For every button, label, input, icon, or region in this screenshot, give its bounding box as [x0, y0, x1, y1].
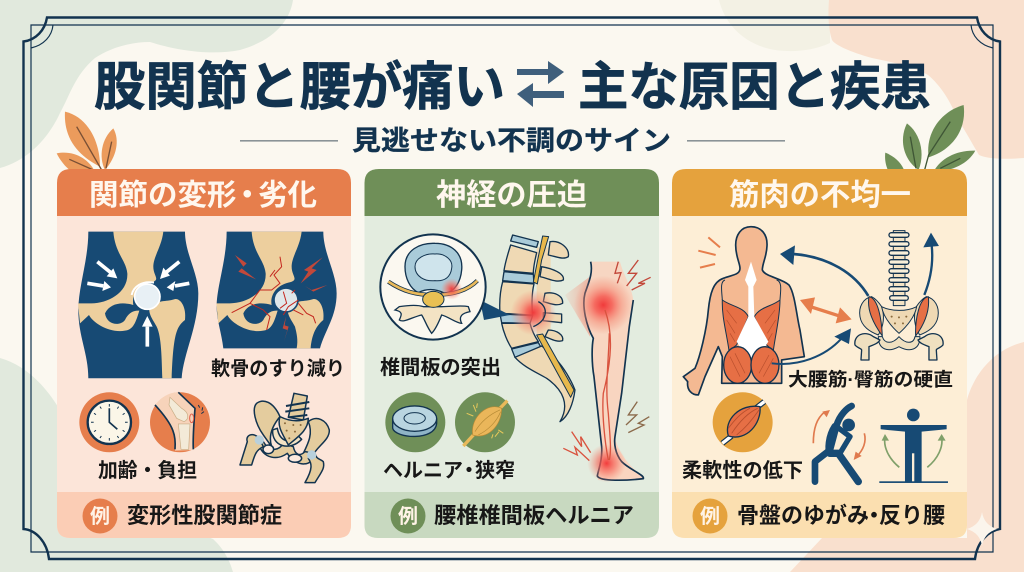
icon: clock: [79, 392, 139, 452]
example bar: 骨盤のゆがみ・反り腰: [737, 503, 945, 528]
panel heading: [57, 169, 351, 216]
background blob: green bottom left: [0, 358, 233, 572]
background blob: green top left: [0, 0, 293, 168]
icon: exchange arrows: [517, 61, 564, 107]
panel background: [364, 215, 659, 538]
panel heading: 神経の圧迫: [436, 179, 587, 212]
icon: stiff muscle: [713, 392, 773, 452]
panel heading: [364, 169, 659, 216]
example bar: 例: [700, 505, 720, 528]
icon: orange leaves: [57, 112, 117, 172]
icon: side stretch figure: [813, 406, 865, 482]
panel: muscle imbalance: [672, 169, 967, 538]
title: 主な原因と疾患: [578, 59, 931, 117]
icon: disc: [385, 392, 445, 452]
illustration: healthy hip under pressure: [78, 232, 198, 378]
icon: nerve narrowing: [455, 392, 515, 452]
label: cartilage wear: 軟骨のすり減り: [211, 357, 345, 380]
icon: sparkle: [967, 512, 997, 546]
example bar: [364, 492, 659, 538]
label: aging and load: 加齢・負担: [98, 459, 197, 482]
illustration: worn hip with cracks: [216, 232, 337, 348]
panel background: [672, 215, 967, 538]
label: hernia and stenosis: ヘルニア・狭窄: [383, 459, 515, 482]
background blob: peach bottom right: [790, 342, 1024, 572]
label: psoas and gluteal stiffness: 大腰筋·臀筋の硬直: [788, 369, 953, 390]
background blob: peach top right: [828, 0, 1024, 159]
example bar: 例: [90, 505, 110, 528]
example bar: 変形性股関節症: [127, 503, 282, 528]
arrows: muscle relationships: [772, 233, 939, 364]
example bar: 腰椎椎間板ヘルニア: [434, 503, 634, 528]
subtitle: 見逃せない不調のサイン: [352, 126, 671, 156]
panel heading: 筋肉の不均一: [729, 179, 911, 212]
example bar: [672, 492, 967, 538]
example bar: [57, 492, 351, 538]
panel heading: [672, 169, 967, 216]
icon: pelvis: [240, 393, 329, 483]
example bar: 例: [398, 505, 418, 528]
illustration: back muscles: [683, 227, 804, 395]
title: 股関節と腰が痛い: [94, 59, 505, 117]
illustration: spine with disc: [500, 235, 590, 422]
icon: green leaves: [885, 105, 975, 172]
icon: knee: [150, 392, 210, 452]
panel background: [57, 215, 351, 538]
label: disc protrusion: 椎間板の突出: [380, 356, 501, 379]
panel: nerve compression: [364, 169, 659, 538]
illustration: spine and pelvis: [855, 231, 943, 360]
title: [94, 59, 931, 117]
background blob: pale top middle: [719, 0, 830, 51]
panel: joint deformation: [57, 169, 351, 538]
label: reduced flexibility: 柔軟性の低下: [682, 459, 803, 482]
illustration: leg with pain: [563, 260, 651, 483]
arrows pointing inward: [87, 262, 189, 347]
illustration: disc cross section: [380, 234, 510, 340]
panel heading: 関節の変形・劣化: [89, 179, 317, 212]
icon: standing figure: [879, 409, 948, 483]
